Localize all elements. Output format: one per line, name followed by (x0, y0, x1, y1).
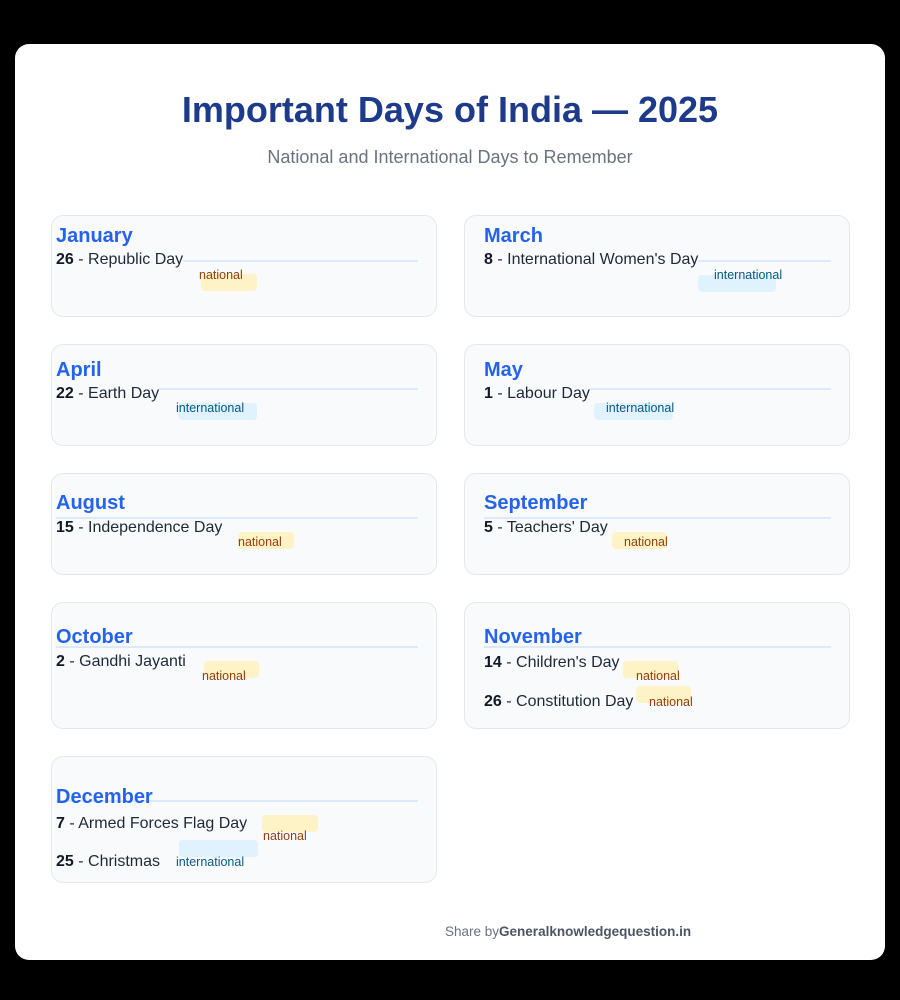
text: national (649, 695, 693, 709)
heading: January: January (56, 225, 133, 247)
heading: September: September (484, 492, 587, 514)
panel: March (464, 215, 850, 317)
badge: international (594, 403, 673, 420)
text: national (636, 669, 680, 683)
badge: international (178, 403, 257, 420)
subtitle: National and International Days to Remember (267, 147, 633, 167)
item: Constitution Day: 26 - Constitution Day (484, 693, 633, 710)
item: Children's Day: 14 - Children's Day (484, 654, 620, 671)
badge: national (201, 274, 257, 291)
item: Teachers' Day: 5 - Teachers' Day (484, 519, 608, 536)
badge: national (262, 815, 318, 832)
heading: December: December (56, 786, 153, 808)
text: international (714, 268, 782, 282)
text: national (202, 669, 246, 683)
text: international (176, 855, 244, 869)
item: Christmas: 25 - Christmas (56, 853, 160, 870)
badge: international (698, 275, 776, 292)
text: international (176, 401, 244, 415)
panel: May (464, 344, 850, 446)
text: national (263, 829, 307, 843)
badge: national (636, 686, 691, 703)
panel: September (464, 473, 850, 575)
item: Gandhi Jayanti: 2 - Gandhi Jayanti (56, 653, 186, 670)
panel: August (51, 473, 437, 575)
heading: March: March (484, 225, 543, 247)
heading: August: August (56, 492, 125, 514)
text: national (624, 535, 668, 549)
badge: national (238, 532, 294, 549)
badge: national (204, 661, 259, 678)
footer: Share byGeneralknowledgequestion.in (445, 924, 691, 939)
badge: international (179, 840, 258, 857)
item: Labour Day: 1 - Labour Day (484, 385, 590, 402)
heading: November: November (484, 626, 582, 648)
heading: October: October (56, 626, 133, 648)
item: Earth Day: 22 - Earth Day (56, 385, 159, 402)
item: Women's Day: 8 - International Women's Day (484, 251, 698, 268)
panel: December (51, 756, 437, 883)
heading: April: April (56, 359, 102, 381)
heading: May: May (484, 359, 523, 381)
text: international (606, 401, 674, 415)
panel: April (51, 344, 437, 446)
text: national (199, 268, 243, 282)
badge: national (623, 661, 678, 678)
text: national (238, 535, 282, 549)
title: Important Days of India — 2025 (182, 89, 718, 130)
item: Armed Forces Flag Day: 7 - Armed Forces Flag Day (56, 815, 247, 832)
panel: January (51, 215, 437, 317)
badge: national (612, 532, 667, 549)
panel: October (51, 602, 437, 729)
item: Independence Day: 15 - Independence Day (56, 519, 222, 536)
item: Republic Day: 26 - Republic Day (56, 251, 183, 268)
panel: November (464, 602, 850, 729)
